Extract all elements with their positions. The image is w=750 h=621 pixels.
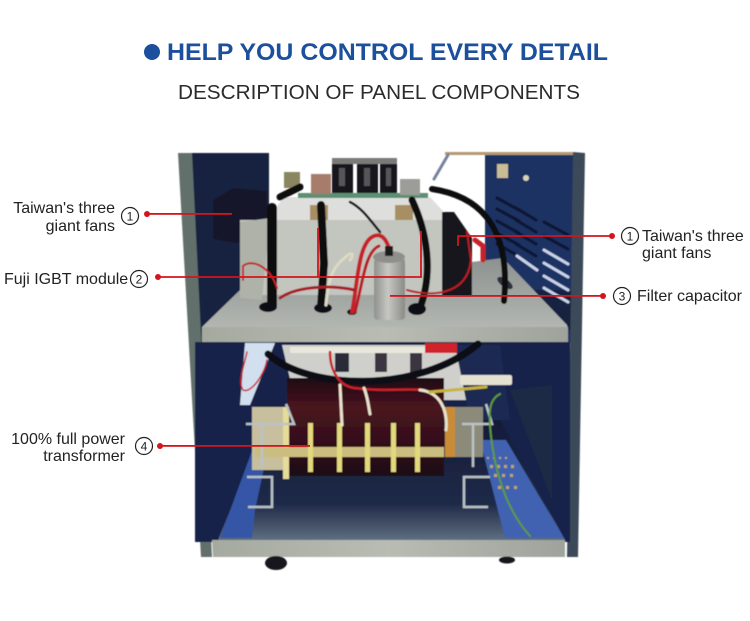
terminal and red label bbox=[425, 343, 512, 385]
callout right: filter capacitor: Filter capacitor bbox=[637, 288, 743, 305]
callout right: fans bbox=[458, 228, 744, 262]
subtitle: DESCRIPTION OF PANEL COMPONENTS bbox=[178, 81, 580, 104]
filter capacitor bbox=[373, 246, 405, 320]
wire grommets bbox=[259, 302, 426, 315]
black cables bbox=[272, 155, 505, 308]
transformer brackets bbox=[246, 404, 492, 507]
title: HELP YOU CONTROL EVERY DETAIL bbox=[167, 39, 608, 66]
callout left: fans: giant fans bbox=[46, 218, 115, 235]
callout left: IGBT module bbox=[4, 228, 421, 288]
product photo: cabinet with components bbox=[178, 152, 585, 570]
transformer bbox=[252, 378, 483, 479]
callout right: filter capacitor bbox=[390, 288, 743, 305]
callout left: transformer bbox=[11, 431, 310, 465]
bottom tray lip bbox=[212, 540, 565, 557]
red and white wires bbox=[243, 232, 483, 312]
callout right: filter capacitor: 3 bbox=[619, 290, 626, 304]
shelf bbox=[202, 258, 568, 342]
callout right: fans: 1 bbox=[627, 230, 634, 244]
callout left: fans: 1 bbox=[127, 210, 134, 224]
callout right: fans: giant fans bbox=[642, 245, 711, 262]
callout left: transformer: 4 bbox=[141, 440, 148, 454]
callout left: fans bbox=[13, 200, 232, 235]
right fan bbox=[442, 212, 472, 296]
left and right grey side walls bbox=[178, 152, 585, 557]
callout left: IGBT module: 2 bbox=[136, 272, 143, 286]
callout left: IGBT module: Fuji IGBT module bbox=[4, 271, 128, 288]
lower compartment bbox=[195, 342, 570, 542]
lower wiring bbox=[241, 344, 530, 536]
wheels bbox=[265, 556, 515, 570]
callout left: transformer: 100% full power bbox=[11, 431, 126, 448]
callout left: fans: Taiwan's three bbox=[13, 200, 115, 217]
right wall ventilation slots bbox=[497, 164, 568, 302]
heatsink bbox=[240, 197, 453, 300]
callout right: fans: Taiwan's three bbox=[642, 228, 744, 245]
floor of cabinet bbox=[218, 385, 565, 540]
left fan bbox=[213, 188, 267, 243]
floor perforations bbox=[487, 457, 517, 489]
upper compartment walls bbox=[190, 152, 575, 343]
capacitor bank and circuit board bbox=[284, 158, 428, 198]
callout left: transformer: transformer bbox=[43, 448, 126, 465]
